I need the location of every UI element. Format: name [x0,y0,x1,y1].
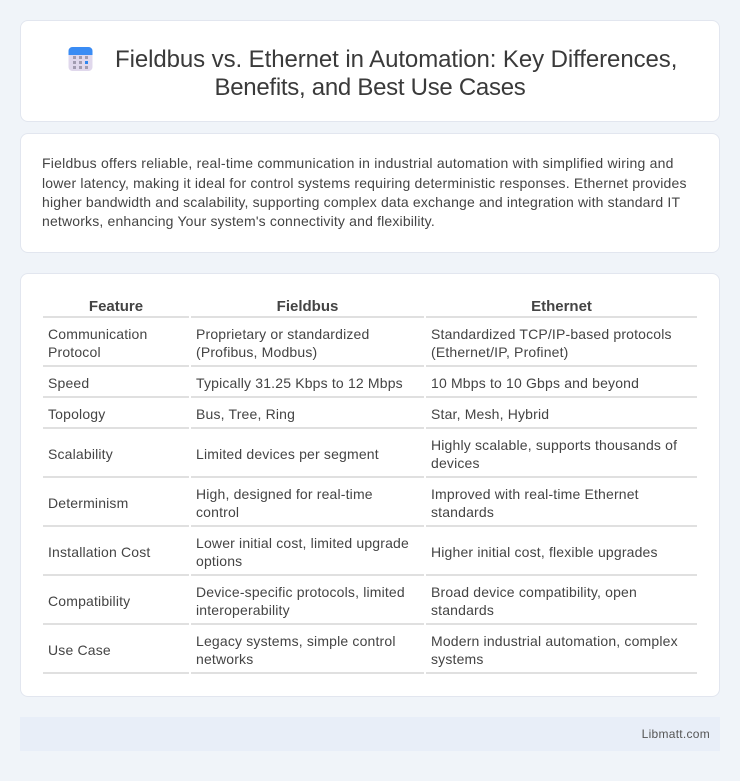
footer credit: Libmatt.com [642,727,710,741]
description text: Fieldbus offers reliable, real-time communication in industrial automation with simplified wiring and [42,155,674,171]
row: Determinism: High, designed for real-time [196,486,373,502]
row: Determinism: control [196,504,239,520]
description text: higher bandwidth and scalability, supporting complex data exchange and integration with standard IT [42,194,680,210]
row: Compatibility: Compatibility [48,593,130,609]
row: Use Case: networks [196,651,253,667]
row: Use Case: Legacy systems, simple control [196,633,396,649]
description text: networks, enhancing Your system's connectivity and flexibility. [42,213,435,229]
row: Speed: Typically 31.25 Kbps to 12 Mbps [196,375,403,391]
row: Topology: Bus, Tree, Ring [196,406,295,422]
row: Communication Protocol: (Ethernet/IP, Profinet) [431,344,568,360]
row: Speed: 10 Mbps to 10 Gbps and beyond [431,375,639,391]
row: Communication Protocol: (Profibus, Modbus) [196,344,317,360]
comparison table [43,298,697,674]
row: Scalability: devices [431,455,480,471]
title: Fieldbus vs. Ethernet in Automation: Key Differences, [115,46,677,73]
row: Communication Protocol: Protocol [48,344,101,360]
row: Scalability: Scalability [48,446,113,462]
column header: Ethernet: Ethernet [531,298,592,315]
row: Determinism: Improved with real-time Ethernet [431,486,639,502]
description text [42,155,687,229]
row: Determinism: standards [431,504,494,520]
row: Compatibility: Broad device compatibility, open [431,584,637,600]
row: Compatibility: Device-specific protocols, limited [196,584,405,600]
row: Determinism: Determinism [48,495,128,511]
footer bar [20,717,720,751]
icon: calendar [68,47,92,71]
row: Speed: Speed [48,375,89,391]
description card [20,133,720,253]
header card [20,20,720,122]
row: Compatibility: interoperability [196,602,290,618]
row: Communication Protocol: Standardized TCP/IP-based protocols [431,326,672,342]
title [68,46,677,101]
row: Communication Protocol: Proprietary or standardized [196,326,369,342]
row: Scalability: Highly scalable, supports thousands of [431,437,677,453]
column header: Feature: Feature [89,298,143,315]
row: Installation Cost: Higher initial cost, flexible upgrades [431,544,658,560]
column header: Fieldbus: Fieldbus [277,298,338,315]
row: Topology: Topology [48,406,105,422]
row: Use Case: Modern industrial automation, complex [431,633,678,649]
table card [20,273,720,697]
row: Installation Cost: options [196,553,242,569]
row: Use Case: systems [431,651,484,667]
row: Topology: Star, Mesh, Hybrid [431,406,549,422]
row: Installation Cost: Lower initial cost, limited upgrade [196,535,409,551]
description text: lower latency, making it ideal for control systems requiring deterministic responses. Ethernet provides [42,175,687,191]
row: Use Case: Use Case [48,642,111,658]
title: Benefits, and Best Use Cases [214,74,526,101]
row: Installation Cost: Installation Cost [48,544,150,560]
row: Compatibility: standards [431,602,494,618]
row: Communication Protocol: Communication [48,326,147,342]
row: Scalability: Limited devices per segment [196,446,379,462]
